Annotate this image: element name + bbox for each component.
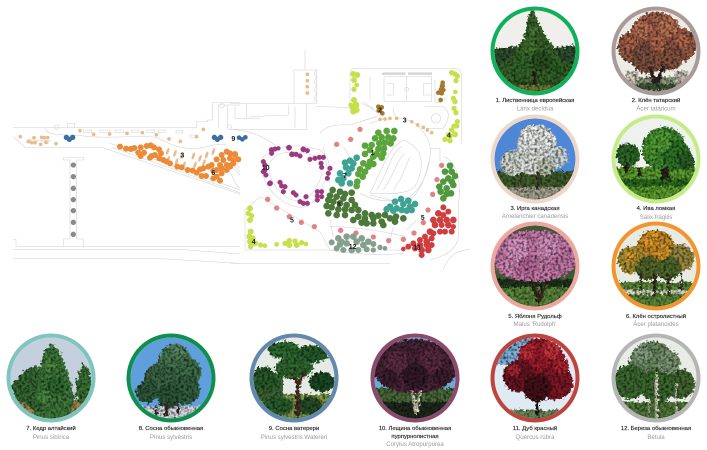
tree card 6: norway maple	[611, 224, 701, 328]
red oak markers	[401, 205, 456, 258]
photo: purple hazel	[370, 336, 460, 424]
orange maple markers continued	[227, 151, 241, 168]
tree card 8: scots pine	[126, 336, 216, 441]
caption: siberian cedar: 7. Кедр алтайский	[26, 425, 76, 432]
caption: norway maple	[626, 313, 686, 328]
orange maple markers	[117, 143, 241, 183]
photo: tatarian maple	[611, 8, 701, 97]
tree card 12: birch	[611, 336, 701, 441]
caption: red oak: 11. Дуб красный	[513, 425, 557, 432]
caption: apple: 5. Яблоня Рудольф	[508, 314, 562, 320]
photo: siberian cedar	[6, 336, 96, 424]
map numbers east: 1	[371, 150, 375, 157]
caption: watereri pine: Pinus sylvestris Watereri	[261, 434, 327, 441]
tree card 7: siberian cedar	[6, 336, 96, 441]
map numbers east: 5	[421, 215, 425, 222]
caption: siberian cedar: Pinus sibírica	[33, 434, 70, 441]
caption: tatarian maple: 2. Клён татарский	[632, 97, 680, 104]
caption: purple hazel: Corylus Atropurpurea	[386, 441, 444, 448]
caption: larch: Lárix decídua	[517, 106, 554, 112]
caption: willow: Sálix frágilis	[640, 214, 672, 221]
plan east part: park, sports ground and tree markers	[227, 50, 470, 270]
plan west part: alley, slope and tree markers	[13, 103, 241, 263]
blue pine markers west	[64, 135, 223, 142]
photo: serviceberry	[490, 116, 580, 205]
caption: willow	[637, 206, 675, 221]
caption: red oak	[513, 425, 557, 441]
caption: watereri pine: 9. Сосна ватерери	[269, 426, 319, 432]
map numbers west: 3	[180, 153, 184, 160]
caption: norway maple: 6. Клён остролистный	[626, 313, 686, 320]
caption: scots pine: Pínus sylvéstris	[150, 434, 192, 441]
tree card 2: tatarian maple	[611, 8, 701, 112]
map numbers east: 12	[349, 244, 357, 251]
map numbers east: 11	[414, 244, 421, 251]
tree card 1: larch	[490, 6, 580, 112]
caption: purple hazel	[379, 426, 451, 448]
tree card 10: purple hazel	[370, 336, 460, 448]
cedar markers	[335, 155, 418, 214]
photo: apple	[490, 224, 580, 312]
photo: scots pine	[126, 336, 216, 424]
willow markers	[246, 70, 460, 249]
photo: norway maple	[611, 224, 701, 312]
caption: larch	[496, 97, 574, 112]
caption: norway maple: Ácer platanoides	[633, 321, 679, 328]
map numbers west: 6	[211, 170, 215, 177]
caption: apple	[508, 314, 562, 328]
tree card 5: apple	[490, 224, 580, 328]
tree card 9: watereri pine	[249, 336, 339, 441]
caption: serviceberry: 3. Ирга канадская	[510, 206, 560, 212]
caption: purple hazel: 10. Лещина обыкновенная	[379, 426, 451, 432]
caption: birch: Bétula	[647, 434, 665, 441]
hazel markers	[261, 145, 332, 206]
larch markers	[354, 128, 397, 189]
site plan map	[13, 50, 470, 270]
caption: larch: 1. Лиственница европейская	[496, 97, 574, 104]
map numbers east: 9	[231, 136, 235, 143]
map numbers west	[180, 153, 215, 177]
peach serviceberry alley markers	[18, 127, 216, 169]
caption: watereri pine	[261, 426, 327, 441]
pine markers	[324, 187, 406, 228]
map numbers east: 5	[290, 217, 294, 224]
larch markers east group	[436, 163, 458, 201]
caption: serviceberry	[502, 206, 568, 220]
map numbers east: 10	[262, 165, 270, 172]
caption: birch: 12. Береза обыкновенная	[621, 426, 691, 432]
map numbers east: 2	[378, 108, 382, 115]
caption: siberian cedar	[26, 425, 76, 441]
plan outlines east	[230, 50, 470, 270]
caption: serviceberry: Amelanchier canadensis	[502, 213, 568, 220]
photo: birch	[611, 336, 701, 424]
gray alley tree markers	[71, 162, 76, 237]
caption: red oak: Quércus rúbra	[516, 434, 555, 441]
tree card 11: red oak	[490, 333, 580, 441]
tatarian maple markers	[376, 81, 445, 115]
birch markers	[329, 234, 387, 253]
tree card 3: serviceberry	[490, 116, 580, 220]
caption: scots pine	[139, 426, 203, 441]
caption: tatarian maple: Ácer tatáricum	[636, 106, 676, 112]
caption: purple hazel: пурпурнолистная	[391, 434, 439, 440]
map numbers east	[231, 108, 451, 251]
caption: birch	[621, 426, 691, 441]
map numbers east: 4	[447, 133, 451, 140]
photo: willow	[611, 116, 701, 205]
photo: watereri pine	[249, 336, 339, 424]
photo: red oak	[490, 333, 580, 424]
photo: larch	[490, 6, 580, 97]
map numbers east: 8	[337, 202, 341, 209]
map numbers east: 4	[252, 239, 256, 246]
blue pine markers east	[237, 135, 248, 142]
caption: scots pine: 8. Сосна обыкновенная	[139, 426, 203, 432]
plan outlines west	[13, 103, 240, 263]
caption: tatarian maple	[632, 97, 680, 112]
caption: willow: 4. Ива ломкая	[637, 206, 675, 212]
apple markers	[265, 127, 444, 243]
map numbers east: 3	[403, 118, 407, 125]
tree card 4: willow	[611, 116, 701, 221]
serviceberry markers east	[305, 72, 433, 134]
map numbers east: 7	[343, 173, 347, 180]
caption: apple: Malus 'Rudolph'	[514, 321, 556, 328]
